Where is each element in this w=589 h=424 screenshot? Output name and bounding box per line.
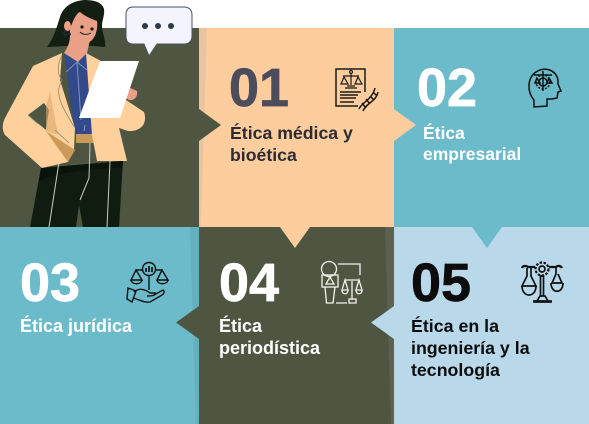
ear [64, 21, 71, 31]
icon: scales with gear [522, 262, 563, 302]
panel: 05 engineering ethics [394, 227, 589, 424]
heading: Ética en la ingeniería y la tecnología: Ética en la [411, 315, 499, 336]
blouse [64, 53, 95, 135]
number 03: 03 [20, 253, 80, 313]
belt [76, 134, 96, 143]
number 01: 01 [229, 58, 289, 118]
blazer [3, 53, 75, 168]
icon: document with scales and DNA [336, 69, 378, 111]
arrow: 01 to 02 [394, 109, 416, 141]
heading: Ética médica y bioética: Ética médica y [230, 122, 353, 143]
icon: head with scales and gear [529, 69, 561, 107]
trouser stitching [49, 143, 110, 227]
heading: Ética periodística: Ética [219, 315, 263, 336]
illustration: woman reading a document [3, 0, 145, 227]
heading: Ética en la ingeniería y la tecnología: ingeniería y la [411, 338, 530, 358]
icon: microphone, warning and scales [322, 262, 362, 303]
heading: Ética empresarial: empresarial [423, 144, 521, 164]
panel: 03 legal ethics [0, 227, 199, 424]
icon: scales over open hand [127, 262, 168, 302]
panel: 04 journalism ethics [199, 227, 394, 424]
number 05: 05 [411, 253, 471, 313]
panel: 01 medical ethics [199, 28, 394, 227]
number 02: 02 [417, 58, 477, 118]
heading: Ética periodística: periodística [219, 338, 321, 358]
heading: Ética en la ingeniería y la tecnología: tecnología [411, 360, 500, 380]
hair [47, 0, 105, 47]
speech bubble [126, 7, 192, 56]
arrow: illustration to 01 [199, 109, 221, 141]
heading: Ética jurídica: Ética jurídica [20, 315, 133, 336]
trousers [30, 161, 123, 227]
panel: illustration background [0, 28, 199, 227]
arrow: 02 to 05 [472, 227, 502, 248]
panel: 02 business ethics [394, 28, 589, 227]
heading: Ética médica y bioética: bioética [230, 145, 297, 165]
number 04: 04 [219, 253, 279, 313]
neck and face [64, 35, 90, 62]
arrow: 04 to 03 [176, 306, 199, 339]
arrow: 01 to 04 [280, 227, 310, 248]
arrow: 05 to 04 [371, 306, 394, 339]
heading: Ética empresarial: Ética [423, 122, 465, 143]
hand [121, 85, 137, 100]
document [79, 61, 139, 118]
